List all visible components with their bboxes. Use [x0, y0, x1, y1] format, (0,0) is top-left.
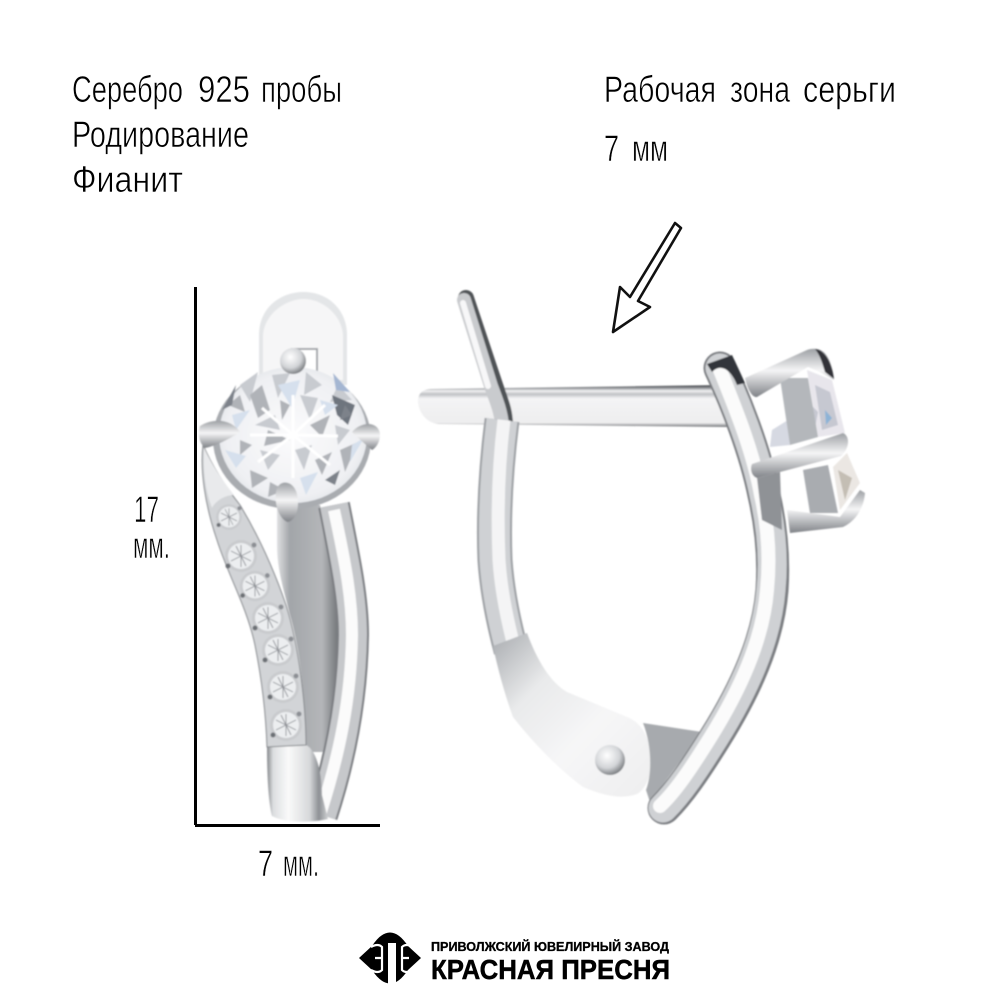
height label [133, 489, 170, 566]
lever plate [493, 633, 652, 797]
text block: working zone: зона [730, 69, 790, 110]
left strut [494, 420, 515, 650]
text block: working zone [604, 69, 896, 169]
hinge pin bar [418, 385, 733, 427]
right band [660, 368, 773, 808]
text block: working zone: мм [632, 128, 668, 169]
gray posts [780, 378, 818, 445]
text block: materials: Серебро [72, 69, 183, 110]
text block: working zone: серьги [803, 69, 896, 110]
arrow [613, 223, 681, 332]
center stone [219, 367, 367, 503]
lower post under prong [757, 472, 782, 530]
logo small text: ПРИВОЛЖСКИЙ ЮВЕЛИРНЫЙ ЗАВОД [431, 939, 669, 954]
setting rim [213, 369, 371, 509]
earring front view [199, 292, 380, 822]
clear hinge pin [259, 292, 347, 385]
width label: мм. [283, 843, 319, 884]
top prong [745, 349, 834, 397]
text block: materials: пробы [261, 69, 342, 110]
text block: working zone: 7 [604, 128, 619, 169]
dimension lines [195, 287, 380, 826]
band bottom block [267, 745, 328, 822]
hook [463, 298, 505, 425]
logo large text: КРАСНАЯ ПРЕСНЯ [431, 954, 670, 985]
text block: materials: 925 [198, 69, 250, 110]
middle strip [277, 505, 341, 752]
dark top edge of band [707, 355, 745, 385]
rivet [595, 745, 625, 775]
bottom prong [787, 490, 865, 533]
logo [359, 932, 670, 986]
height label: мм. [133, 525, 170, 566]
logo emblem [359, 932, 421, 986]
stone side view [770, 370, 860, 510]
text block: materials: Фианит [72, 159, 183, 200]
prongs [199, 348, 380, 522]
gray wedge [643, 723, 702, 802]
text block: working zone: Рабочая [604, 69, 716, 110]
right shank [321, 505, 353, 815]
width label [258, 843, 319, 884]
pave band [202, 445, 306, 747]
text block: materials [72, 69, 342, 200]
height label: 17 [134, 489, 159, 530]
width label: 7 [258, 843, 273, 884]
earring side view [418, 298, 865, 808]
text block: materials: Родирование [72, 114, 249, 155]
middle prong [751, 433, 848, 478]
